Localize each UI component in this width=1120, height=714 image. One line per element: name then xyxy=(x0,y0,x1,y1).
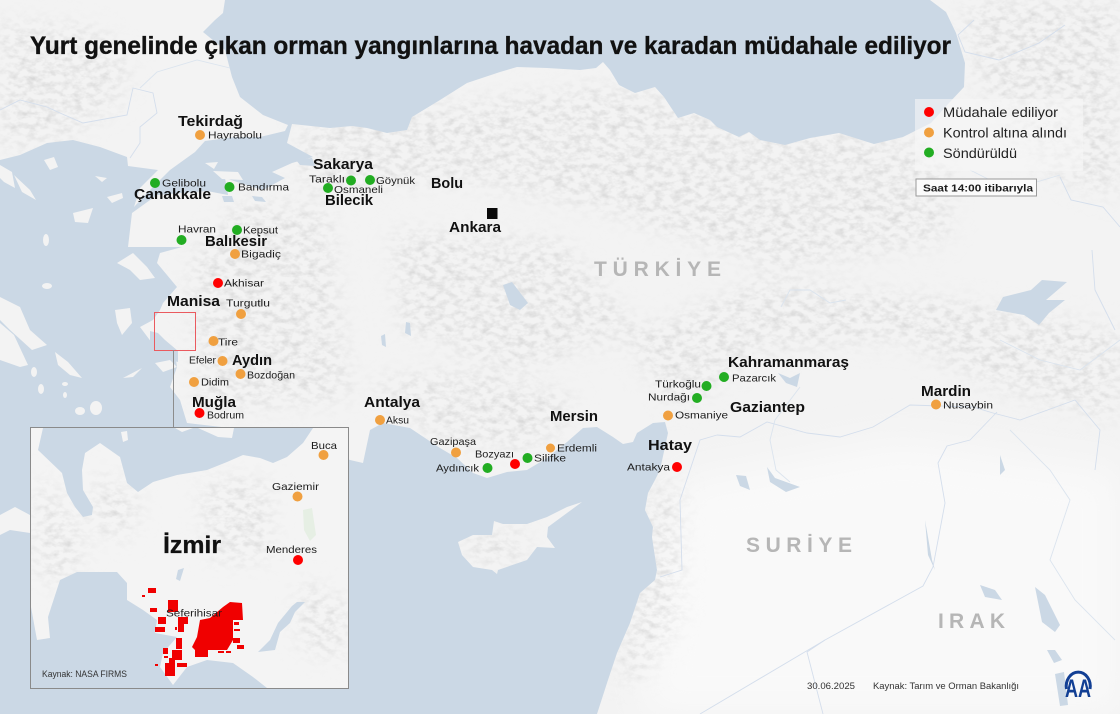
inset label: Menderes xyxy=(266,544,317,565)
marker: Osmaniye: Osmaniye xyxy=(675,410,728,422)
label: Balıkesir: Balıkesir xyxy=(205,234,267,250)
country borders xyxy=(660,20,1120,714)
label: Çanakkale: Çanakkale xyxy=(134,187,211,203)
inset label: Gaziemir: Gaziemir xyxy=(272,481,320,493)
marker: Antakya xyxy=(627,462,682,474)
label: Sakarya: Sakarya xyxy=(313,157,374,173)
marker: Taraklı xyxy=(309,174,356,186)
inset label: İzmir: İzmir xyxy=(163,532,221,559)
marker: Antakya: Antakya xyxy=(627,462,670,474)
label: Mardin: Mardin xyxy=(921,384,971,400)
icon: AA logo xyxy=(1065,672,1091,703)
inset map: İzmir xyxy=(30,428,348,688)
marker: Taraklı: Taraklı xyxy=(309,174,345,186)
label: Muğla: Muğla xyxy=(192,395,237,411)
marker: Tire xyxy=(208,336,238,348)
legend xyxy=(915,99,1083,171)
label: Gaziantep: Gaziantep xyxy=(730,400,805,416)
marker: Didim: Didim xyxy=(201,376,229,388)
time stamp box xyxy=(916,179,1036,196)
marker: Pazarcık: Pazarcık xyxy=(732,372,777,384)
icon: AA logo: AA xyxy=(1065,675,1091,703)
marker: Turgutlu: Turgutlu xyxy=(226,298,270,310)
marker: Gazipaşa xyxy=(430,436,476,458)
marker: Hayrabolu: Hayrabolu xyxy=(208,130,262,142)
marker: Nurdağı: Nurdağı xyxy=(648,392,690,404)
marker: Nusaybin: Nusaybin xyxy=(943,400,993,412)
marker: Türkoğlu: Türkoğlu xyxy=(655,378,701,390)
inset label: Menderes: Menderes xyxy=(266,544,317,556)
country label: Suriye: SURİYE xyxy=(746,534,852,557)
marker: Nurdağı xyxy=(648,392,702,404)
marker: Bodrum xyxy=(194,408,244,422)
marker: Kepsut: Kepsut xyxy=(243,224,278,236)
marker: Gazipaşa: Gazipaşa xyxy=(430,436,476,448)
marker: Erdemli: Erdemli xyxy=(557,442,597,454)
country label: Irak: IRAK xyxy=(938,610,1005,633)
marker: Havran: Havran xyxy=(178,224,216,236)
date: 30.06.2025 xyxy=(807,681,855,692)
marker: Silifke: Silifke xyxy=(534,452,566,464)
inset label: Gaziemir xyxy=(272,481,320,502)
marker: Osmaneli xyxy=(323,183,383,196)
source: Kaynak: Tarım ve Orman Bakanlığı xyxy=(873,681,1019,692)
marker: Gelibolu xyxy=(150,178,206,190)
marker: Akhisar xyxy=(213,278,265,290)
marker: Turgutlu xyxy=(226,298,270,319)
capital marker: Ankara xyxy=(449,208,502,236)
inset label: Buca: Buca xyxy=(311,440,337,452)
marker: Göynük: Göynük xyxy=(376,175,416,187)
marker: Osmaneli: Osmaneli xyxy=(334,184,383,196)
label: Bilecik: Bilecik xyxy=(325,193,374,209)
marker: Havran xyxy=(176,224,216,245)
inset source: Kaynak: NASA FIRMS xyxy=(42,669,127,679)
legend: Müdahale ediliyor xyxy=(943,105,1059,120)
legend: Kontrol altına alındı xyxy=(943,126,1067,140)
marker: Bozdoğan: Bozdoğan xyxy=(247,370,295,382)
marker: Efeler: Efeler xyxy=(189,354,216,366)
fire hotspots xyxy=(142,588,244,676)
marker: Bozyazı xyxy=(475,448,520,469)
marker: Pazarcık xyxy=(719,372,777,384)
label: Hatay: Hatay xyxy=(648,438,692,454)
marker: Türkoğlu xyxy=(655,378,712,391)
label: Mersin: Mersin xyxy=(550,409,598,425)
inset label: Buca xyxy=(311,440,337,460)
marker: Tire: Tire xyxy=(218,336,238,348)
marker: Aydıncık: Aydıncık xyxy=(436,462,480,474)
marker: Akhisar: Akhisar xyxy=(224,278,265,290)
inset label: Seferihisar: Seferihisar xyxy=(166,608,223,620)
country label: Türkiye: TÜRKİYE xyxy=(594,258,721,281)
marker: Bigadiç: Bigadiç xyxy=(241,248,281,260)
marker: Bozyazı: Bozyazı xyxy=(475,448,514,460)
label: Bolu: Bolu xyxy=(431,176,463,192)
legend: Söndürüldü xyxy=(943,146,1017,161)
locator rectangle for İzmir xyxy=(154,312,196,350)
sea patch around Izmir peninsula xyxy=(150,331,178,362)
time stamp box: Saat 14:00 itibarıyla xyxy=(923,182,1033,194)
lighter southern plains xyxy=(640,440,1120,714)
marker: Bandırma: Bandırma xyxy=(238,182,289,194)
marker: Bigadiç xyxy=(230,248,281,260)
label: Tekirdağ: Tekirdağ xyxy=(178,114,243,130)
marker: Aksu xyxy=(375,414,409,426)
marker: Bodrum: Bodrum xyxy=(207,410,244,422)
leader line to inset xyxy=(172,350,174,428)
label: Aydın: Aydın xyxy=(232,353,272,369)
marker: Erdemli xyxy=(546,442,597,454)
label: Antalya: Antalya xyxy=(364,395,421,411)
marker: Aksu: Aksu xyxy=(386,414,409,426)
title: Yurt genelinde çıkan orman yangınlarına havadan ve karadan müdahale ediliyor xyxy=(30,32,951,60)
label: Kahramanmaraş: Kahramanmaraş xyxy=(728,355,849,371)
marker: Gelibolu: Gelibolu xyxy=(162,178,206,190)
marker: Silifke xyxy=(522,452,566,464)
marker: Didim xyxy=(189,376,229,388)
label: Manisa: Manisa xyxy=(167,294,221,310)
capital marker: Ankara: Ankara xyxy=(449,220,502,236)
